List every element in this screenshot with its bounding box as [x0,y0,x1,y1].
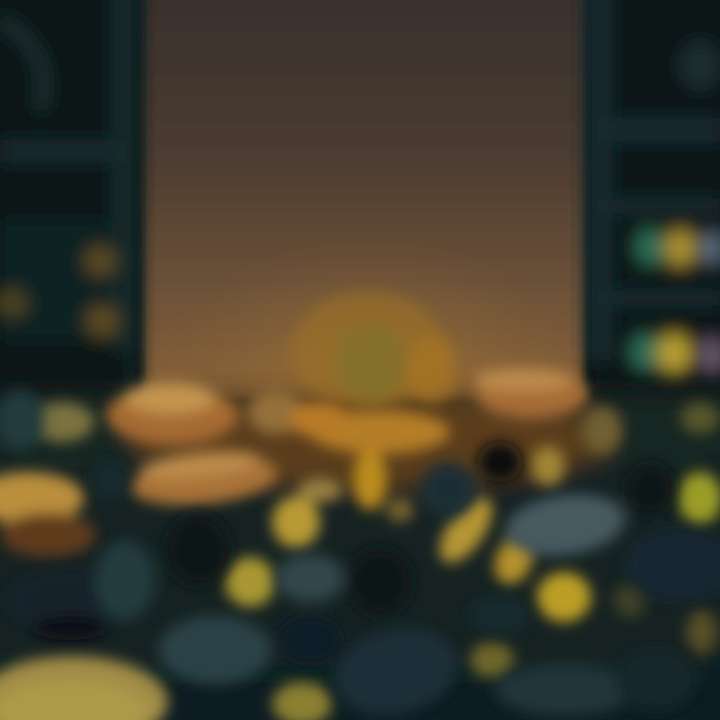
large gold coin bottom left [0,656,168,720]
slate and black coins in the pile [0,390,720,720]
gold and orange coins in the pile [0,368,720,720]
panel: left dark shelving [0,0,140,390]
icon: central glowing gold coin [292,292,456,408]
panel: right dark shelving [586,0,720,390]
floor of dark coins [0,394,720,720]
